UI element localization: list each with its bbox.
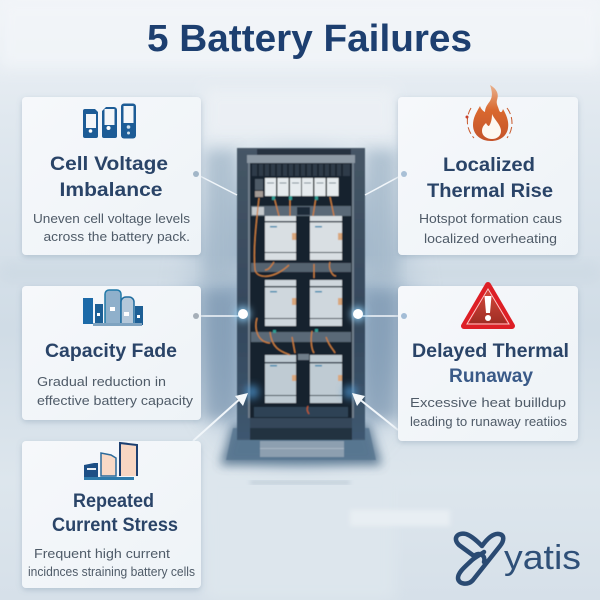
description (419, 211, 563, 246)
wordmark: yatis (504, 539, 581, 577)
description: localized overheating (424, 231, 557, 246)
heading (50, 154, 168, 201)
heading: Capacity Fade (45, 341, 177, 362)
circuit breakers (265, 178, 338, 196)
icon: chain link (456, 534, 503, 584)
module accents (292, 233, 342, 381)
description: Uneven cell voltage levels (33, 211, 191, 226)
description: across the battery pack. (44, 229, 190, 244)
description: Excessive heat builldup (410, 395, 566, 410)
heading (52, 491, 178, 536)
heading: Repeated (73, 491, 154, 512)
heading (427, 155, 553, 202)
connector dot (401, 313, 407, 319)
left control unit (255, 179, 263, 197)
connector dot (401, 171, 407, 177)
rack base plinth (220, 425, 382, 465)
heading: Cell Voltage (50, 154, 168, 175)
orange cables (254, 197, 336, 414)
description: Hotspot formation caus (419, 211, 563, 226)
panel: localized thermal rise (398, 85, 578, 255)
description: Frequent high current (34, 546, 170, 561)
heading: Thermal Rise (427, 181, 553, 202)
bus rails (251, 206, 351, 417)
title: 5 Battery Failures (147, 18, 472, 60)
icon: three battery cells (83, 104, 136, 138)
heading: Delayed Thermal (412, 341, 569, 362)
description (410, 395, 567, 429)
description: effective battery capacity (37, 393, 194, 408)
heading: Runaway (449, 366, 533, 387)
teal connectors (272, 196, 318, 333)
icon: warning triangle (464, 285, 512, 326)
description (28, 546, 195, 579)
connector dot (193, 313, 199, 319)
icon: rising current bars (84, 443, 137, 480)
description: leading to runaway reatiios (410, 414, 567, 429)
description: Gradual reduction in (37, 374, 166, 389)
panel: capacity fade (22, 286, 201, 420)
description (33, 211, 191, 244)
panel: repeated current stress (22, 441, 201, 588)
heading: Localized (443, 155, 535, 176)
icon: flame (466, 85, 512, 141)
description: incidnces straining battery cells (28, 564, 195, 579)
cooling vent (252, 164, 350, 176)
panel: delayed thermal runaway (398, 285, 578, 441)
battery rack cabinet (220, 148, 382, 465)
rack frame (237, 148, 365, 440)
heading: Imbalance (60, 180, 162, 201)
glow points and arrowheads (235, 307, 365, 406)
description (37, 374, 194, 408)
logo: yatis (456, 534, 581, 584)
connector dot (193, 171, 199, 177)
connector lines (193, 174, 404, 441)
heading: Current Stress (52, 515, 178, 536)
heading (412, 341, 569, 387)
panel: cell voltage imbalance (22, 97, 201, 255)
battery modules (265, 216, 342, 403)
icon: fading capacity cells (83, 290, 143, 326)
